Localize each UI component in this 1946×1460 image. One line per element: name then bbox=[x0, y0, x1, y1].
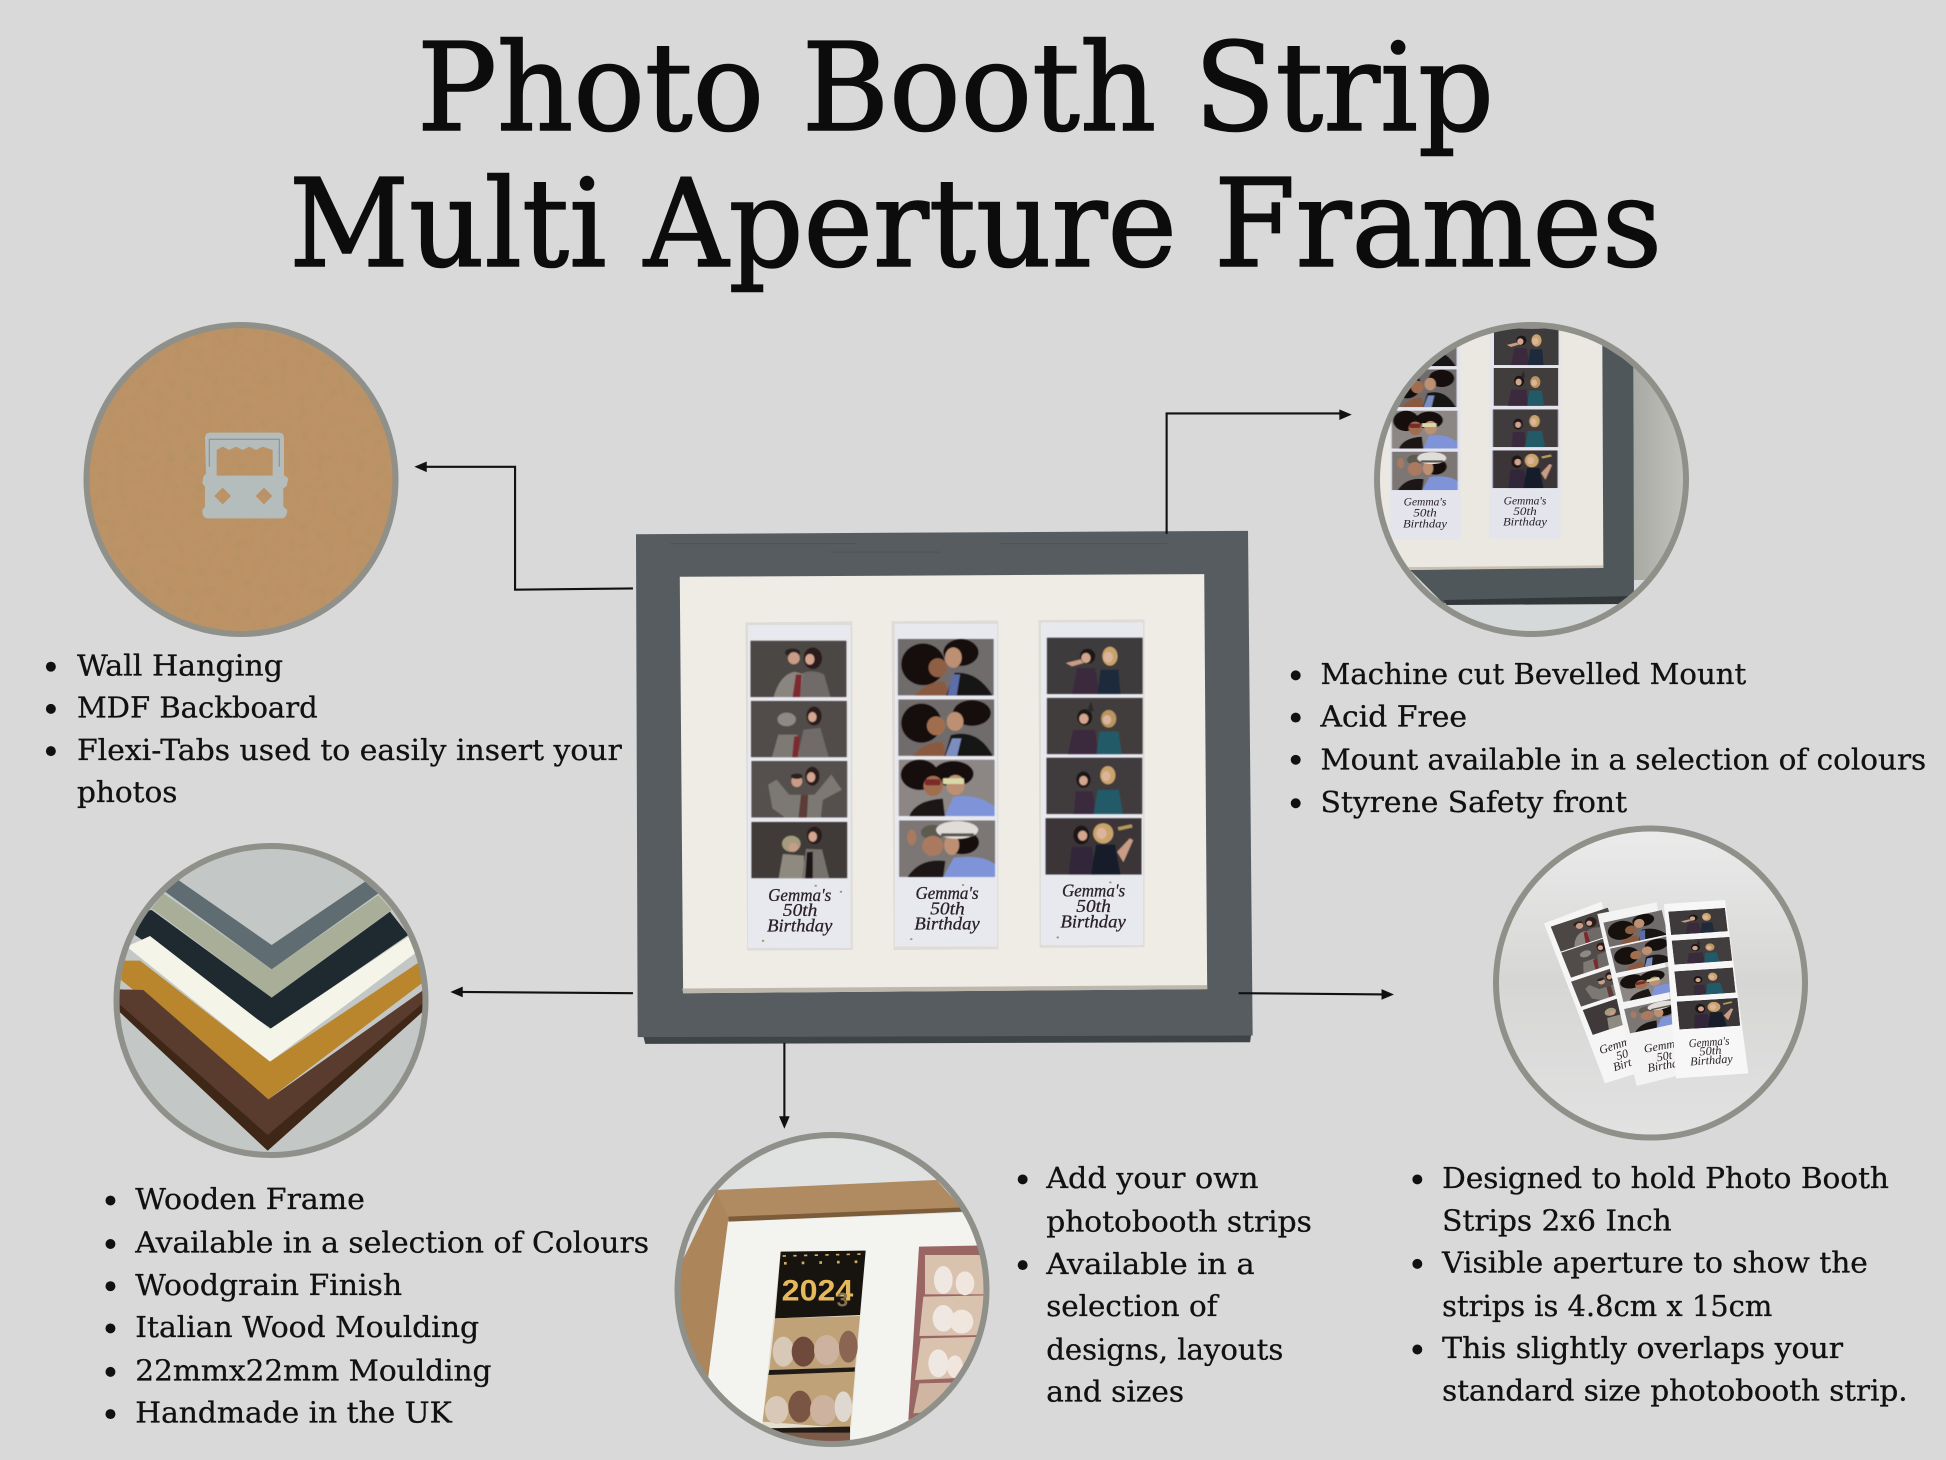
aperture strip 1 bbox=[745, 621, 853, 951]
title: Photo Booth Strip bbox=[417, 17, 1494, 159]
text block: design features bbox=[1018, 1162, 1312, 1409]
left strip: 50 bbox=[1614, 1046, 1630, 1063]
text block: backboard features: MDF Backboard bbox=[77, 692, 318, 725]
strip: 2024 party: 3 bbox=[837, 1289, 848, 1312]
text block: design features: designs, layouts bbox=[1046, 1333, 1283, 1366]
right strip: 50th bbox=[1699, 1043, 1722, 1058]
text block: strip size features bbox=[1412, 1162, 1908, 1407]
aperture strip 3: Birthday bbox=[1060, 912, 1126, 932]
text block: mount features: Machine cut Bevelled Mount bbox=[1321, 658, 1747, 691]
middle strip: 50t bbox=[1656, 1048, 1674, 1064]
aperture strip 2: Gemma's bbox=[915, 884, 979, 904]
title bbox=[289, 17, 1662, 295]
arrow: to strips circle bbox=[1239, 991, 1391, 998]
strip: 2024 party bbox=[762, 1251, 866, 1442]
aperture strip 1: 50th bbox=[783, 901, 817, 921]
aperture strip 2: Birthday bbox=[914, 915, 980, 934]
text block: mount features: Styrene Safety front bbox=[1321, 786, 1628, 819]
circle: frame corner with own strips bbox=[674, 1132, 990, 1447]
aperture strip 1: Gemma's bbox=[768, 886, 832, 905]
text block: design features: and sizes bbox=[1046, 1376, 1184, 1409]
middle strip: Birthd bbox=[1646, 1056, 1680, 1075]
title: Multi Aperture Frames bbox=[289, 153, 1662, 295]
text block: strip size features: Visible aperture to show the bbox=[1441, 1247, 1868, 1280]
middle strip: Gemm bbox=[1643, 1036, 1676, 1056]
circle: bevelled mount detail: Gemma's bbox=[1404, 497, 1447, 509]
text block: design features: Add your own bbox=[1045, 1162, 1258, 1195]
left strip bbox=[1544, 902, 1634, 1084]
text block: backboard features: Flexi-Tabs used to easily insert your bbox=[77, 734, 622, 767]
text block: backboard features: photos bbox=[77, 776, 177, 809]
aperture strip 3: 50th bbox=[1076, 897, 1111, 917]
aperture strip 3 bbox=[1038, 619, 1144, 948]
arrow: to corner circle bbox=[781, 1043, 788, 1126]
circle: bevelled mount detail: 50th bbox=[1413, 507, 1437, 519]
circle: loose photo booth strips bbox=[1493, 826, 1808, 1140]
text block: strip size features: standard size photobooth strip. bbox=[1442, 1374, 1908, 1407]
strip: wedding bbox=[908, 1246, 984, 1420]
text block: strip size features: Strips 2x6 Inch bbox=[1442, 1204, 1672, 1237]
left strip: Birt bbox=[1611, 1055, 1634, 1074]
text block: design features: Available in a bbox=[1045, 1248, 1255, 1281]
text block: design features: photobooth strips bbox=[1046, 1206, 1312, 1239]
text block: frame features bbox=[105, 1183, 649, 1430]
strip: 2024 party: 2024 bbox=[782, 1274, 854, 1307]
text block: strip size features: Designed to hold Photo Booth bbox=[1442, 1162, 1889, 1195]
aperture strip 2: 50th bbox=[930, 899, 965, 919]
icon: sawtooth hanger bbox=[202, 433, 288, 518]
text block: frame features: Woodgrain Finish bbox=[135, 1269, 402, 1302]
aperture strip 2 bbox=[891, 620, 998, 950]
aperture strip 1: Birthday bbox=[767, 916, 833, 936]
circle: bevelled mount detail: Birthday bbox=[1503, 517, 1548, 529]
right strip: Birthday bbox=[1690, 1051, 1734, 1068]
circle: bevelled mount detail: 50th bbox=[1513, 506, 1537, 518]
left strip: Gemma bbox=[1597, 1032, 1637, 1057]
arrow: to colours circle bbox=[453, 988, 633, 996]
circle: MDF backboard with hanger bbox=[84, 322, 398, 637]
right strip: Gemma's bbox=[1688, 1034, 1730, 1050]
aperture strip 3: Gemma's bbox=[1062, 881, 1125, 901]
circle: bevelled mount detail bbox=[1374, 322, 1689, 637]
text block: design features: selection of bbox=[1046, 1290, 1220, 1323]
text block: strip size features: strips is 4.8cm x 15cm bbox=[1442, 1290, 1772, 1323]
text block: strip size features: This slightly overlaps your bbox=[1442, 1332, 1843, 1365]
text block: mount features: Acid Free bbox=[1319, 700, 1467, 733]
text block: frame features: Wooden Frame bbox=[135, 1183, 365, 1216]
circle: stacked frame colours bbox=[114, 843, 428, 1158]
arrow: to mount circle bbox=[1167, 411, 1349, 534]
text block: frame features: Italian Wood Moulding bbox=[135, 1311, 479, 1344]
arrows and feature text (drawn in base coordinates) bbox=[46, 411, 1926, 1430]
text block: frame features: Available in a selection of Colours bbox=[134, 1227, 649, 1260]
text block: backboard features bbox=[46, 649, 622, 809]
circle: bevelled mount detail: Gemma's bbox=[1504, 495, 1547, 507]
text block: frame features: Handmade in the UK bbox=[135, 1397, 452, 1430]
text block: frame features: 22mmx22mm Moulding bbox=[135, 1355, 491, 1388]
right strip bbox=[1664, 900, 1748, 1078]
main photo frame bbox=[636, 531, 1253, 1044]
text block: backboard features: Wall Hanging bbox=[77, 649, 283, 682]
circle: bevelled mount detail: Birthday bbox=[1403, 518, 1448, 530]
arrow: to backboard circle bbox=[417, 463, 633, 590]
middle strip bbox=[1597, 902, 1676, 1086]
text block: mount features bbox=[1291, 658, 1926, 819]
text block: mount features: Mount available in a selection of colours bbox=[1321, 744, 1926, 777]
